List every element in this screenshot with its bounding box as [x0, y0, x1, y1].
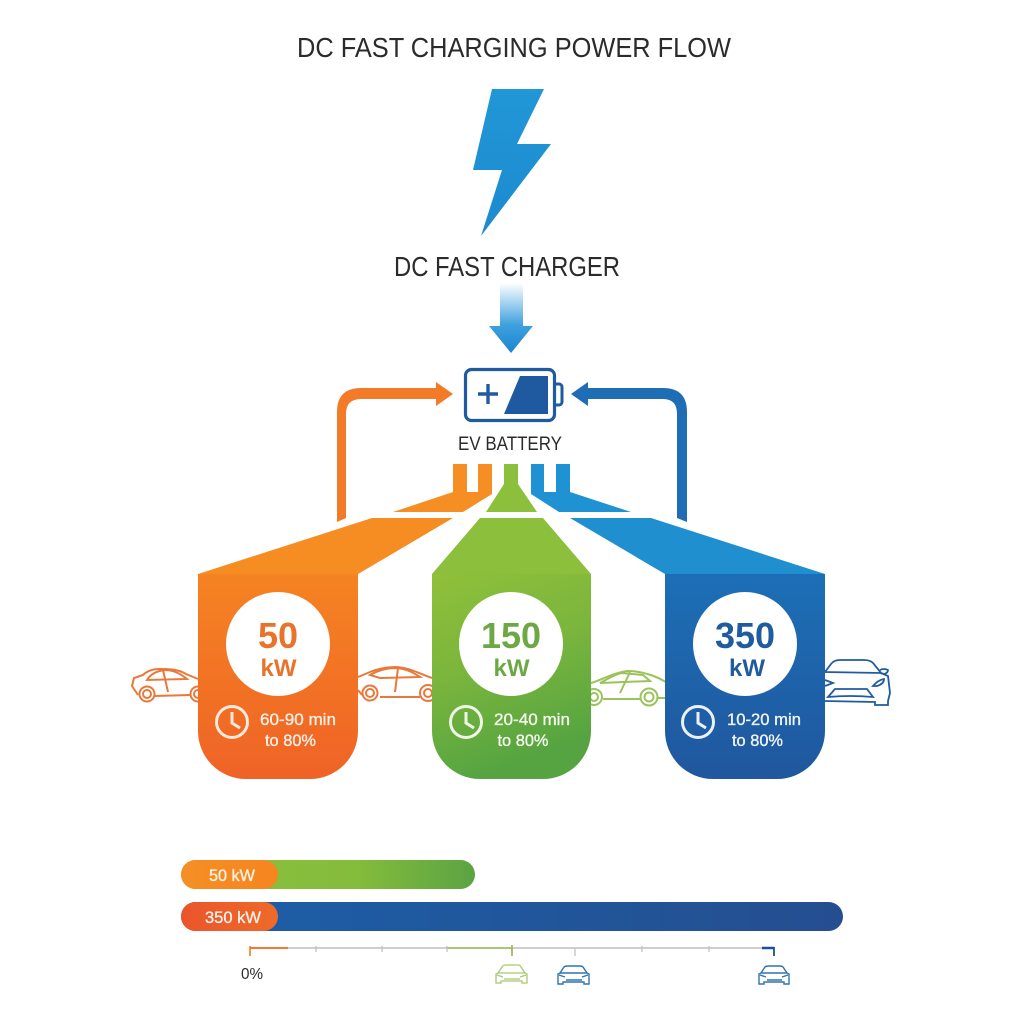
icon: lightning bolt	[473, 89, 551, 236]
icon: clock	[450, 706, 482, 738]
title: DC FAST CHARGING POWER FLOW	[297, 32, 732, 63]
charge target: to 80%	[732, 731, 783, 750]
power badge	[226, 592, 330, 696]
bar label: 50 kW	[209, 866, 255, 885]
arrow: orange return to battery	[337, 382, 453, 522]
blue upper funnel	[531, 464, 631, 512]
power unit: kW	[729, 655, 765, 682]
power unit: kW	[260, 655, 297, 682]
power unit: kW	[494, 655, 530, 682]
comparison bar: 50 kW	[181, 860, 475, 889]
timeline car: blue end	[759, 966, 789, 984]
side car: orange left	[132, 669, 206, 702]
heading: DC fast charger: DC FAST CHARGER	[394, 251, 620, 282]
charging time: 20-40 min	[494, 710, 570, 729]
panel: 50 kW	[198, 518, 453, 779]
comparison bar: 350 kW	[181, 902, 843, 931]
icon: EV battery	[466, 370, 562, 420]
label: EV battery: EV BATTERY	[458, 434, 562, 455]
arrow: charger to battery	[489, 283, 533, 353]
charging time: 10-20 min	[727, 710, 801, 729]
charge target: to 80%	[498, 731, 548, 750]
charging time: 60-90 min	[260, 710, 336, 729]
timeline car: green	[496, 965, 527, 983]
charge target: to 80%	[265, 731, 316, 750]
power value: 350	[715, 615, 775, 656]
front car: blue	[825, 660, 890, 705]
icon: clock	[682, 706, 714, 738]
green upper funnel	[486, 464, 537, 512]
timeline car: blue middle	[558, 966, 589, 984]
side car: green	[586, 671, 666, 706]
axis label: 0%: 0%	[241, 966, 263, 983]
orange upper funnel	[393, 464, 492, 512]
side car: orange middle	[358, 667, 436, 701]
arrow: blue return to battery	[571, 382, 687, 522]
power badge	[459, 592, 563, 696]
bar label: 350 kW	[205, 908, 261, 927]
panel: 150 kW	[432, 518, 591, 779]
icon: clock	[216, 706, 248, 738]
power value: 150	[481, 615, 541, 656]
panel: 350 kW	[570, 518, 825, 779]
power badge	[693, 592, 797, 696]
power value: 50	[258, 615, 298, 656]
progress timeline	[250, 945, 774, 956]
